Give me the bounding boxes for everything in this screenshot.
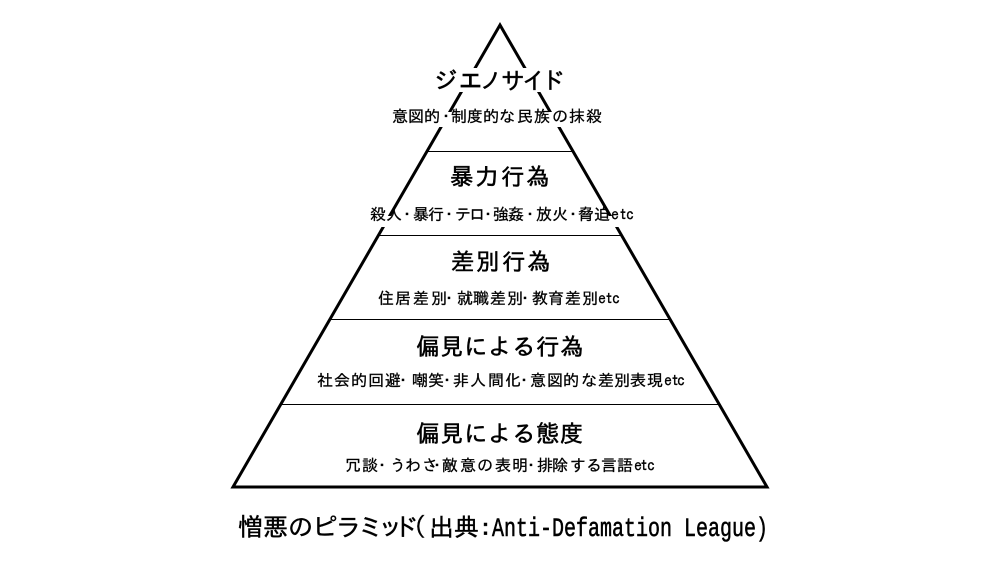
caption: source name: Anti-Defamation League) — [492, 514, 768, 545]
tier 5 heading: 偏見による態度 — [416, 421, 584, 445]
tier 1 heading: ェ — [456, 64, 485, 93]
caption — [238, 514, 768, 545]
tier 3 heading: 差別行為 — [451, 249, 550, 273]
tier 1: genocide — [392, 64, 602, 124]
tier 2: violence — [370, 164, 634, 222]
tier 1 heading: ノサイド — [479, 68, 564, 92]
tier 3 description: 住居差別・就職差別・教育差別etc — [378, 290, 620, 306]
caption: Japanese part: 憎悪のピラミッド（出典： — [238, 515, 498, 540]
tier 3: discrimination — [378, 249, 620, 306]
pyramid outline — [233, 25, 767, 487]
tier 2 description: 殺人・暴行・テロ・強姦・放火・脅迫etc — [370, 206, 634, 222]
tier 5 description: 冗談・うわさ・敵意の表明・排除する言語etc — [345, 457, 655, 473]
tier 4 heading: 偏見による行為 — [416, 334, 584, 358]
tier 2 heading: 暴力行為 — [450, 164, 550, 188]
tier 1 heading: ジ — [434, 68, 458, 92]
tier 1 description: 意図的・制度的な民族の抹殺 — [392, 108, 602, 124]
tier 4: prejudiced acts — [317, 334, 685, 388]
tier 5: prejudiced attitudes — [345, 421, 655, 473]
tier 4 description: 社会的回避・嘲笑・非人間化・意図的な差別表現etc — [317, 372, 685, 388]
